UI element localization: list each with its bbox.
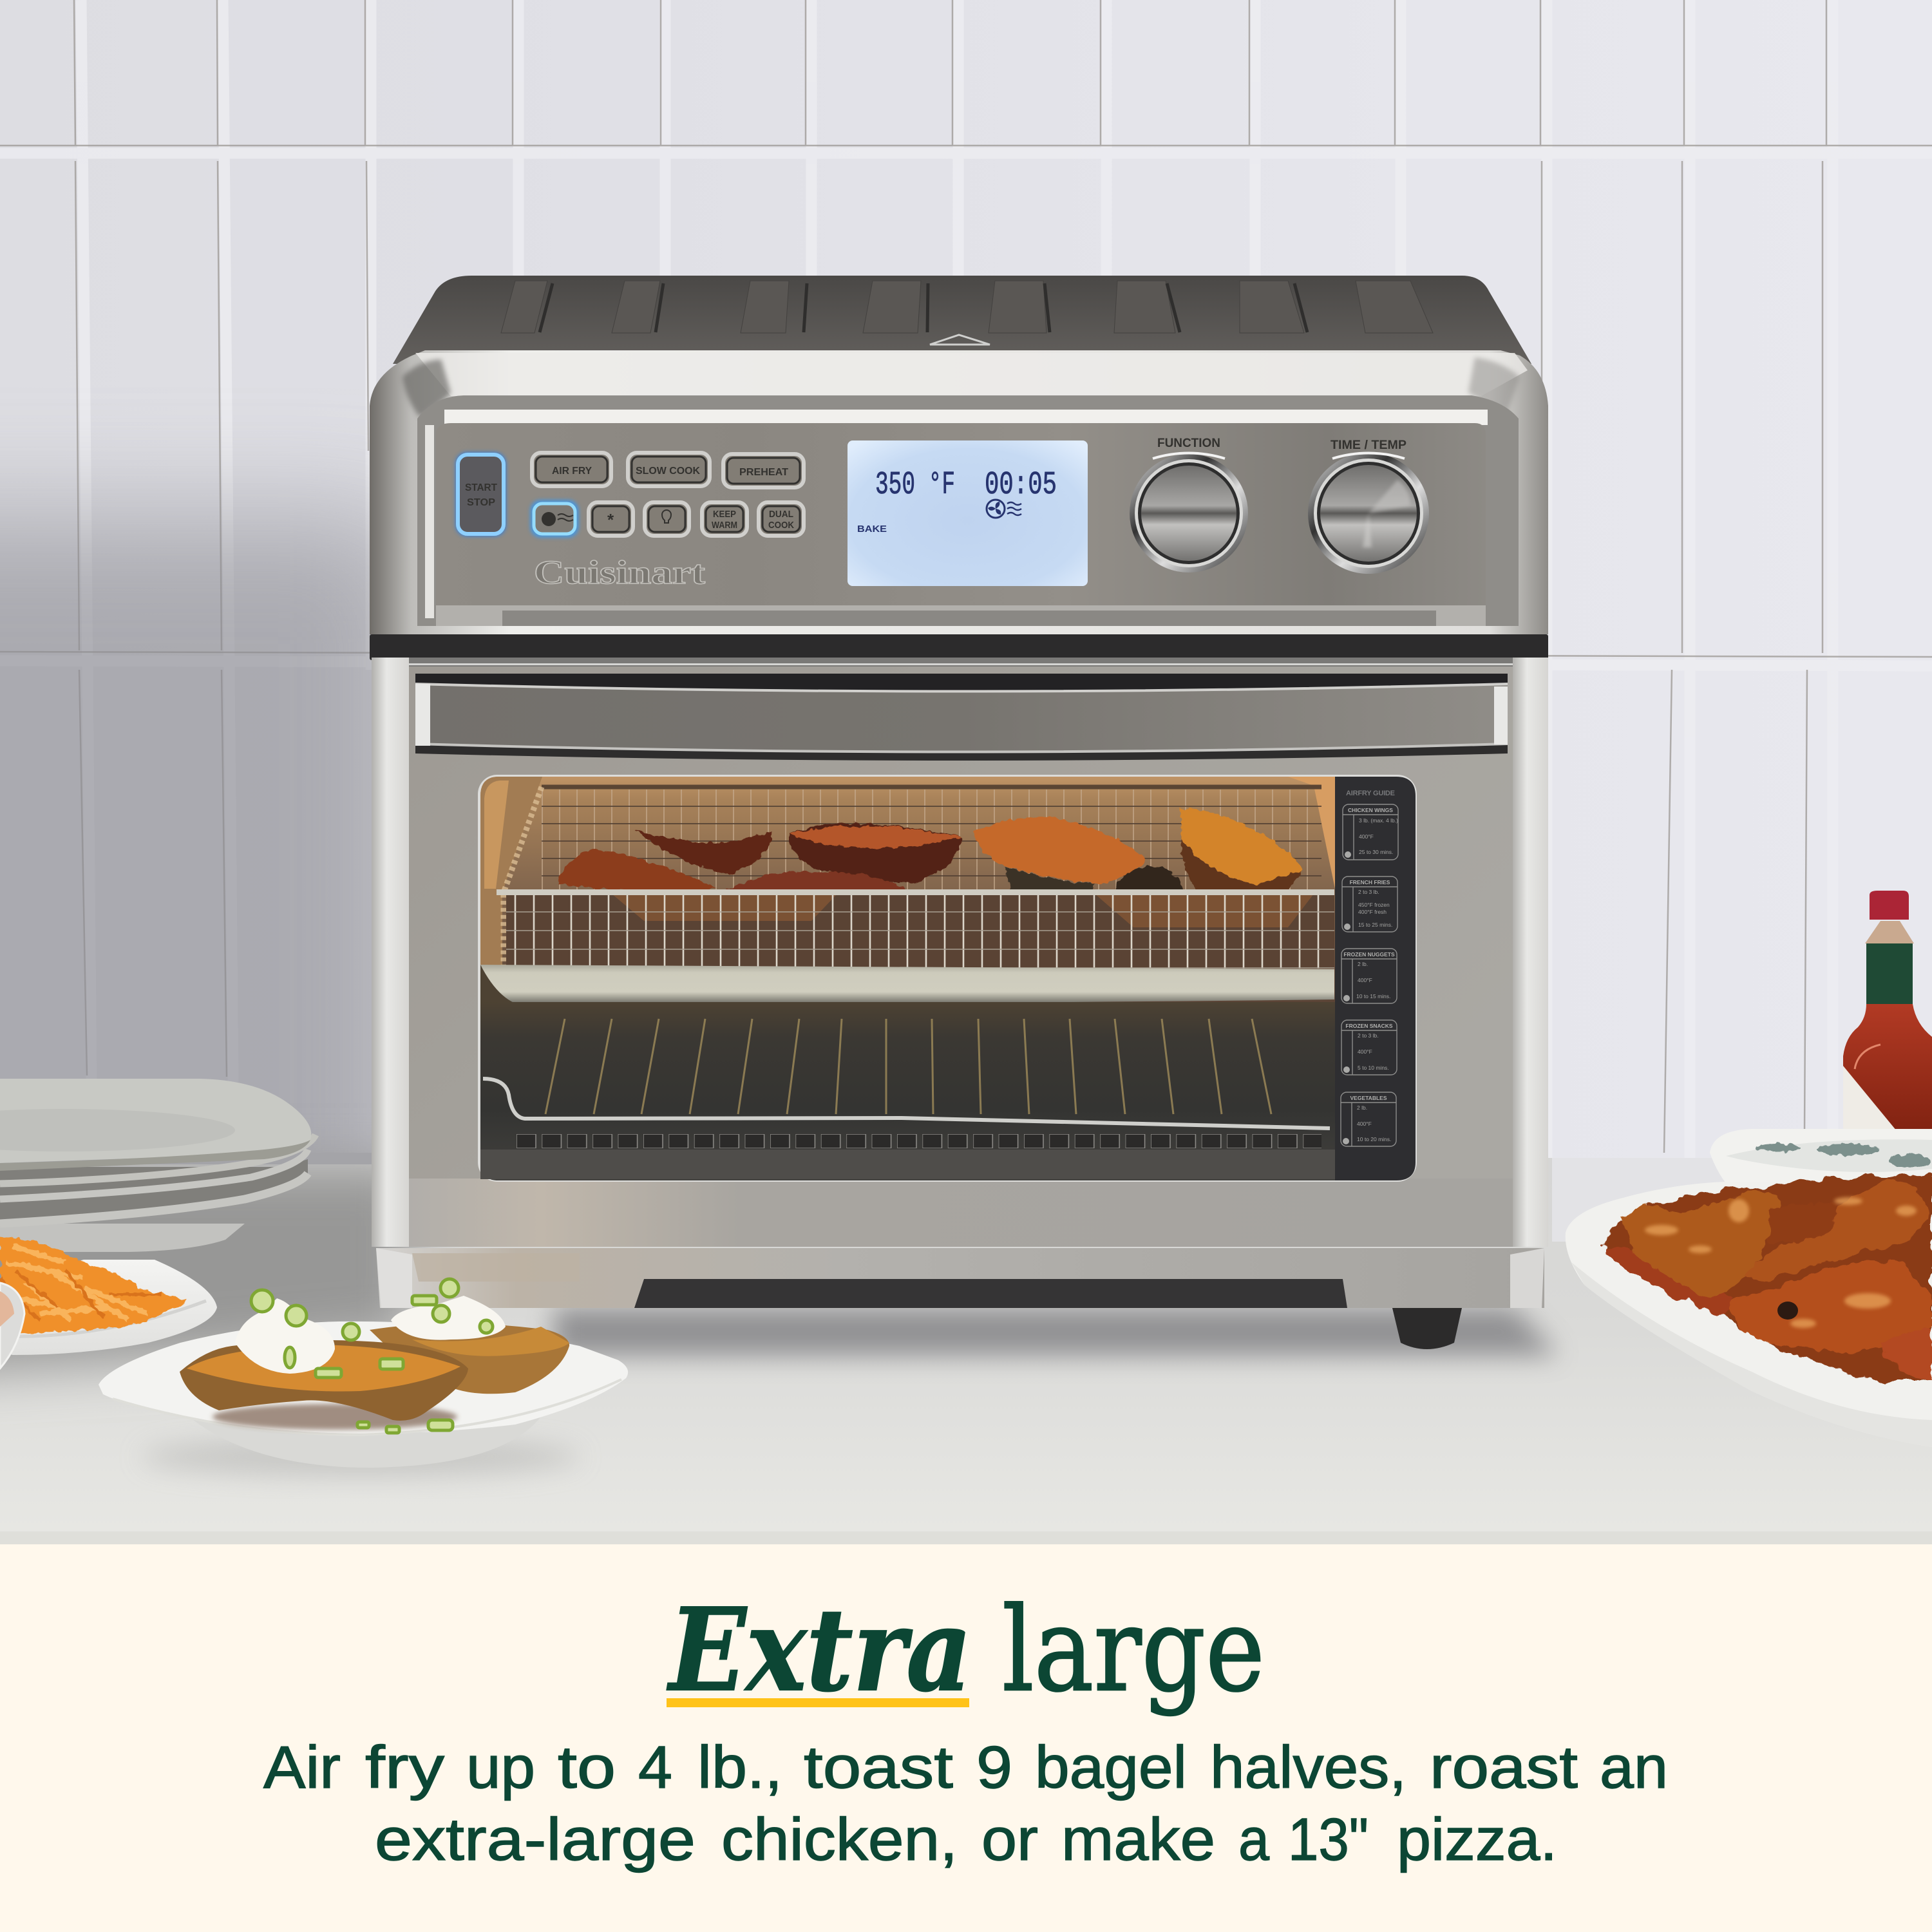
function buttons: WARM xyxy=(712,520,737,531)
gap between head and door xyxy=(370,634,1548,660)
airfry guide panel: 400°F fresh xyxy=(1358,909,1387,915)
icon: fan with heat waves xyxy=(987,500,1021,518)
oven window xyxy=(478,775,1417,1182)
airfry guide panel: 400°F xyxy=(1359,833,1374,840)
LCD display: 350 °F xyxy=(875,467,955,504)
airfry guide panel: 400°F xyxy=(1358,977,1372,983)
brand wordmark: Cuisinart xyxy=(534,554,706,591)
function buttons: PREHEAT xyxy=(739,467,788,478)
subheading: to xyxy=(558,1734,616,1801)
countertop xyxy=(0,1153,1932,1544)
oven top with vents xyxy=(393,276,1531,364)
function buttons: COOK xyxy=(768,520,794,531)
plate of loaded potato skins xyxy=(99,1279,628,1476)
LCD display: 00:05 xyxy=(985,467,1057,504)
yellow underline xyxy=(667,1698,969,1707)
air fryer oven xyxy=(370,276,1548,1349)
function knob xyxy=(1130,437,1248,573)
shredded cheddar xyxy=(0,1236,187,1334)
chicken wings xyxy=(1604,1175,1932,1381)
caption band xyxy=(0,1544,1932,1932)
subheading: 13" xyxy=(1288,1806,1368,1873)
plate of shredded cheese xyxy=(0,1236,217,1368)
oven interior upper xyxy=(480,777,1335,1005)
subheading: toast xyxy=(804,1734,953,1801)
subheading: extra-large xyxy=(375,1806,696,1873)
function buttons: AIR FRY xyxy=(552,466,592,477)
subheading: make xyxy=(1061,1806,1215,1873)
door handle xyxy=(415,674,1508,761)
heading xyxy=(667,1583,1265,1718)
airfry guide panel xyxy=(1335,777,1416,1180)
glass ramekin xyxy=(0,1283,24,1368)
shadow beneath oven xyxy=(554,1307,1558,1356)
subheading: or xyxy=(981,1806,1038,1873)
airfry guide panel: 15 to 25 mins. xyxy=(1358,922,1392,928)
oven base xyxy=(376,1248,1544,1308)
heading: large xyxy=(1002,1583,1265,1718)
control panel xyxy=(436,423,1486,626)
subheading: fry xyxy=(365,1734,445,1801)
subheading: bagel xyxy=(1035,1734,1187,1801)
airfry guide panel: 2 lb. xyxy=(1357,1104,1367,1111)
subheading xyxy=(263,1734,1668,1873)
baked potato skins xyxy=(557,808,1302,893)
function buttons: DUAL xyxy=(769,509,793,520)
airfry guide panel: 2 lb. xyxy=(1358,961,1368,967)
function buttons xyxy=(530,453,804,538)
lower compartment xyxy=(480,965,1335,1180)
control head shell xyxy=(370,350,1548,634)
function buttons: * xyxy=(607,510,614,529)
tiled wall xyxy=(0,0,1932,1288)
function buttons: SLOW COOK xyxy=(636,466,700,477)
airfry guide panel: 2 to 3 lb. xyxy=(1358,1032,1379,1039)
start stop button xyxy=(455,452,506,536)
airfry guide panel: 25 to 30 mins. xyxy=(1359,849,1393,855)
subheading: 9 xyxy=(976,1734,1012,1801)
platter of buffalo wings xyxy=(1566,1175,1932,1447)
front basket mesh xyxy=(497,889,1334,969)
blue cheese dip bowl xyxy=(1710,1129,1932,1211)
airfry guide panel: 3 lb. (max. 4 lb.) xyxy=(1359,817,1398,824)
airfry guide panel: 450°F frozen xyxy=(1358,902,1390,908)
airfry guide panel: FRENCH FRIES xyxy=(1350,879,1390,886)
subheading: halves, xyxy=(1210,1734,1406,1801)
airfry guide panel: CHICKEN WINGS xyxy=(1348,807,1393,813)
airfry guide panel: VEGETABLES xyxy=(1350,1095,1387,1101)
time temp knob: TIME / TEMP xyxy=(1331,439,1406,452)
subheading: up xyxy=(466,1734,535,1801)
LCD display: BAKE xyxy=(857,524,887,535)
drip pan xyxy=(480,965,1334,1003)
subheading: 4 xyxy=(638,1734,672,1801)
airfry guide panel: 400°F xyxy=(1357,1121,1372,1127)
subheading: chicken, xyxy=(721,1806,958,1873)
green onions xyxy=(251,1279,493,1433)
function buttons: KEEP xyxy=(713,509,736,520)
stack of grey plates xyxy=(0,1079,316,1252)
start stop button: START xyxy=(465,482,497,493)
function knob: FUNCTION xyxy=(1157,437,1220,450)
time temp knob xyxy=(1308,439,1429,574)
airfry guide panel: 400°F xyxy=(1358,1048,1372,1055)
subheading: a xyxy=(1238,1806,1269,1873)
subheading: roast xyxy=(1430,1734,1578,1801)
soft shadow on the wall xyxy=(0,515,419,1288)
subheading: Air xyxy=(263,1734,341,1801)
oven door xyxy=(372,658,1548,1247)
airfry guide panel: AIRFRY GUIDE xyxy=(1346,790,1395,797)
sour cream dollops xyxy=(235,1298,335,1374)
airfry guide panel: 5 to 10 mins. xyxy=(1358,1065,1389,1071)
subheading: pizza. xyxy=(1397,1806,1557,1873)
airfry guide panel: FROZEN NUGGETS xyxy=(1343,951,1395,958)
oven foot xyxy=(1392,1308,1462,1349)
hot sauce bottle xyxy=(1843,891,1932,1140)
subheading: lb., xyxy=(697,1734,782,1801)
LCD display xyxy=(848,440,1088,586)
airfry guide panel: 10 to 20 mins. xyxy=(1357,1136,1391,1142)
airfry guide panel: 2 to 3 lb. xyxy=(1358,889,1379,895)
airfry guide panel: FROZEN SNACKS xyxy=(1345,1023,1393,1029)
subheading: an xyxy=(1600,1734,1668,1801)
front potato skin xyxy=(180,1340,468,1421)
heading: Extra xyxy=(667,1583,972,1717)
start stop button: STOP xyxy=(467,497,495,508)
rear potato skin xyxy=(370,1323,569,1394)
airfry guide panel: 10 to 15 mins. xyxy=(1356,993,1390,999)
